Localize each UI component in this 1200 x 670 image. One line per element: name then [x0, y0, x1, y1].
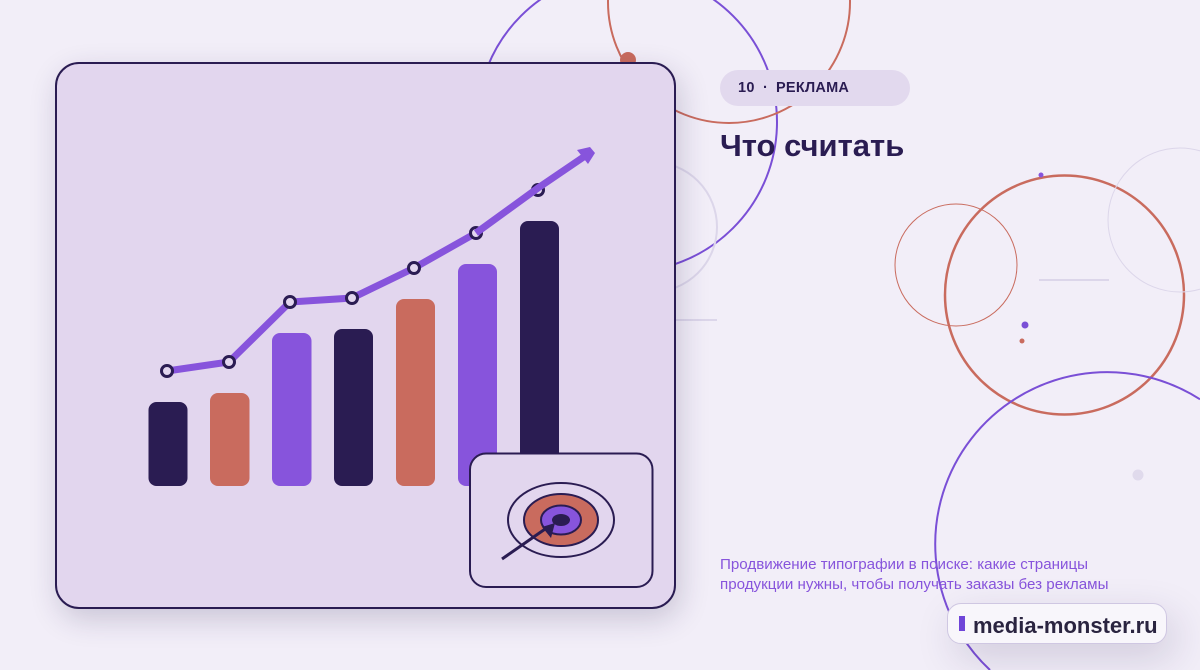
description text [720, 556, 1108, 593]
section label pill [720, 70, 910, 106]
brand badge [947, 603, 1167, 644]
section label pill: 10 [738, 80, 755, 96]
panel: growth chart illustration [55, 62, 676, 609]
line chart with rising arrow [162, 147, 595, 376]
section label pill: РЕКЛАМА [776, 80, 849, 96]
description text: Продвижение типографии в поиске: какие страницы [720, 556, 1088, 573]
brand badge: media-monster.ru [973, 613, 1158, 638]
inset: target with arrow [470, 454, 652, 587]
bar chart [148, 221, 559, 486]
title: Что считать [720, 128, 904, 163]
description text: продукции нужны, чтобы получать заказы без рекламы [720, 576, 1108, 593]
section label pill: · [763, 80, 768, 96]
